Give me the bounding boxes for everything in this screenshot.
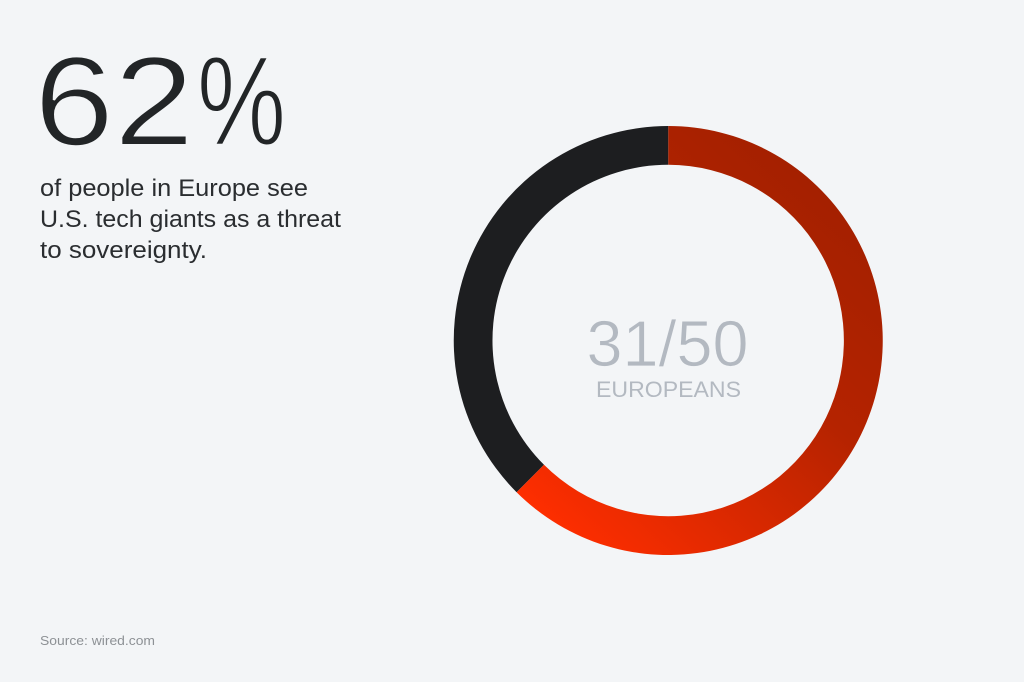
donut segment: remaining share (dark) xyxy=(454,126,668,492)
description text: of people in Europe see xyxy=(40,175,308,202)
description text xyxy=(40,175,341,264)
donut centre value: 31/50: 31/50 xyxy=(586,307,748,380)
source note: Source: wired.com xyxy=(40,633,155,648)
headline statistic: 62% xyxy=(34,30,286,172)
headline statistic: 62%: % xyxy=(197,30,286,172)
donut segment: share seeing a threat (red gradient) xyxy=(517,126,883,555)
headline statistic: 62%: 62 xyxy=(34,30,194,172)
description text: to sovereignty. xyxy=(40,237,207,264)
donut centre label: EUROPEANS: EUROPEANS xyxy=(596,377,741,402)
donut chart xyxy=(454,126,883,555)
description text: U.S. tech giants as a threat xyxy=(40,206,341,233)
